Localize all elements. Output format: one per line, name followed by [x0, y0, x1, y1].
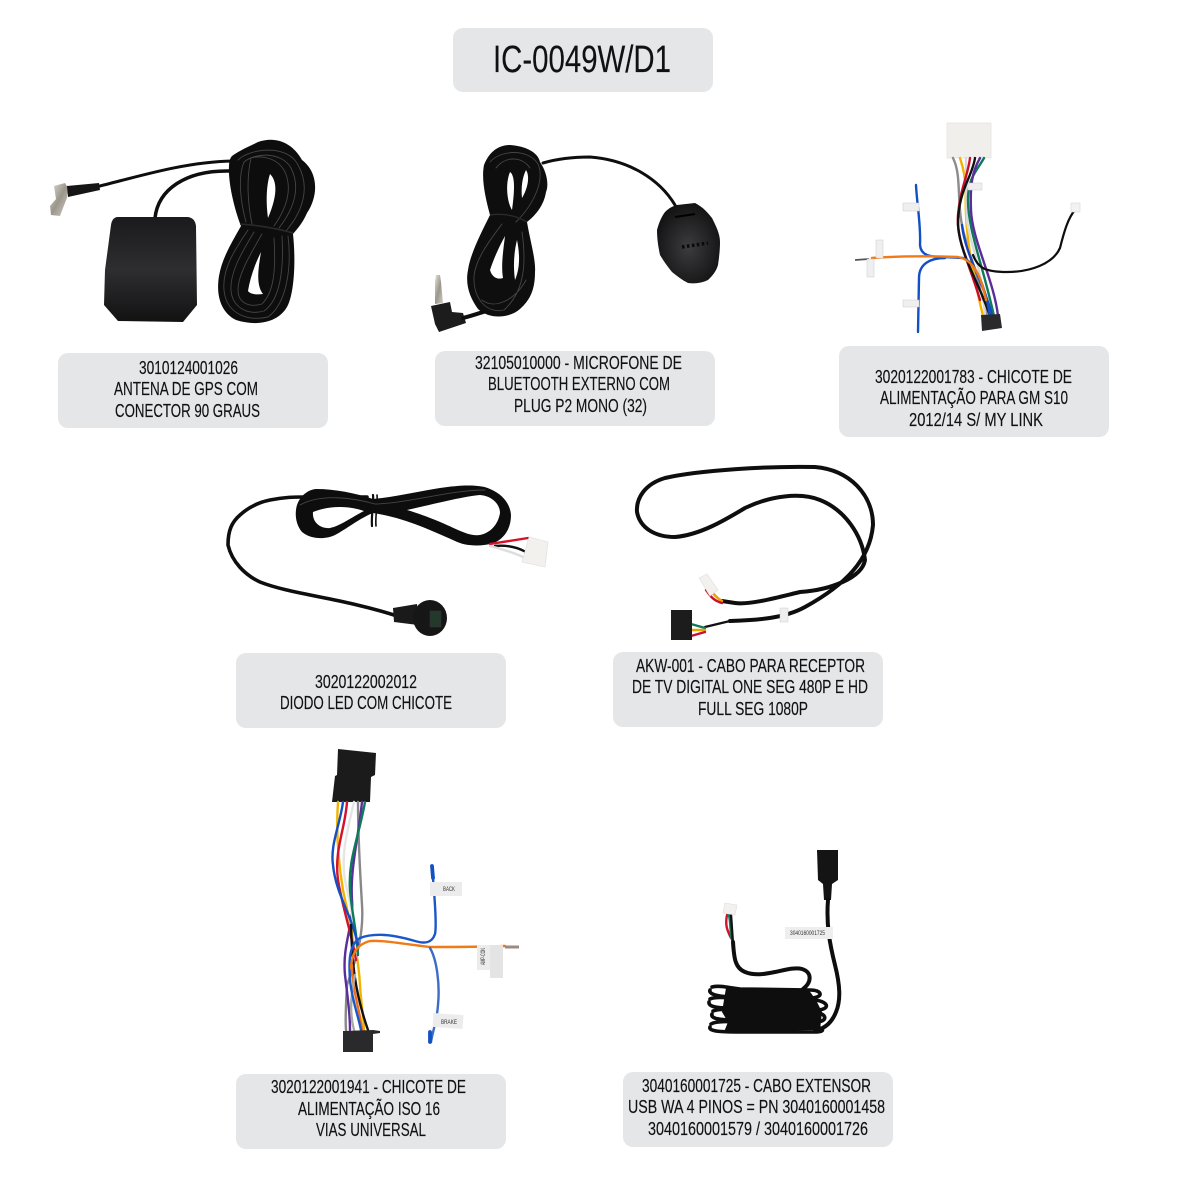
wire tags	[867, 183, 1080, 307]
caption: LED diode	[236, 653, 506, 728]
antenna cables	[100, 161, 232, 218]
wire tails	[691, 588, 730, 636]
black connector	[981, 314, 1002, 331]
caption: TV cable: FULL SEG 1080P	[698, 699, 808, 719]
white connector	[699, 574, 718, 596]
caption: microphone: PLUG P2 MONO (32)	[514, 396, 647, 416]
title	[453, 28, 713, 92]
caption: USB cable: 3040160001579 / 3040160001726	[648, 1119, 868, 1139]
LED wires	[490, 538, 528, 558]
icon: LED diode cable	[228, 486, 548, 636]
icon: USB extension cable	[709, 850, 839, 1032]
caption: TV cable: DE TV DIGITAL ONE SEG 480P E HD	[632, 677, 868, 697]
icon: ISO 16 harness	[332, 749, 519, 1052]
TV cable	[637, 467, 873, 621]
caption: microphone	[435, 351, 715, 426]
bundle wires	[332, 802, 368, 1030]
BACK label	[430, 882, 462, 896]
coiled cable	[218, 140, 315, 323]
caption: GM S10 harness: 2012/14 S/ MY LINK	[909, 410, 1043, 430]
blue wires	[916, 185, 990, 316]
P2 plug	[431, 275, 466, 332]
caption: ISO 16 harness: VIAS UNIVERSAL	[316, 1120, 426, 1140]
white connector	[947, 123, 991, 158]
small connector wires	[726, 915, 733, 944]
caption: LED diode: DIODO LED COM CHICOTE	[280, 693, 452, 713]
side cable	[973, 210, 1075, 272]
microphone cable coil	[463, 145, 675, 318]
USB plug	[817, 850, 838, 900]
caption: GM S10 harness	[839, 346, 1109, 437]
caption: ISO 16 harness: 3020122001941 - CHICOTE DE	[271, 1077, 466, 1097]
LED cable	[228, 497, 394, 615]
icon: GPS antenna	[50, 140, 315, 323]
antenna body	[104, 217, 197, 322]
caption: GM S10 harness: ALIMENTAÇÃO PARA GM S10	[880, 387, 1068, 408]
caption: USB cable	[623, 1072, 893, 1147]
caption: ISO 16 harness	[236, 1074, 506, 1149]
black connector	[671, 610, 692, 640]
orange wire	[872, 256, 986, 300]
branch wires	[349, 866, 519, 1042]
AMP-CON label	[477, 945, 503, 978]
cable tag	[780, 608, 788, 622]
harness wires	[855, 158, 1075, 332]
BRAKE label	[433, 1013, 463, 1029]
caption: ISO 16 harness: ALIMENTAÇÃO ISO 16	[298, 1098, 440, 1119]
caption: GPS antenna: 3010124001026	[139, 358, 238, 378]
icon: GM S10 power harness	[855, 123, 1080, 332]
icon: digital TV cable	[637, 467, 873, 640]
caption: TV cable	[613, 652, 883, 727]
SMA connector	[50, 183, 100, 216]
part number tag: 3040160001725	[790, 931, 826, 937]
USB cable and coil	[709, 900, 839, 1032]
caption: GM S10 harness: 3020122001783 - CHICOTE DE	[875, 367, 1072, 387]
part number tag	[785, 927, 833, 939]
caption: microphone: BLUETOOTH EXTERNO COM	[488, 374, 670, 394]
ISO connector	[332, 749, 376, 802]
title: IC-0049W/D1	[493, 39, 671, 81]
icon: bluetooth microphone	[431, 145, 720, 332]
bottom connector	[343, 1030, 380, 1052]
BACK label: BACK	[443, 887, 455, 893]
AMP-CON label: AMP-CON	[481, 948, 487, 965]
caption: GPS antenna: ANTENA DE GPS COM	[114, 379, 258, 399]
white plug	[522, 537, 548, 567]
caption: GPS antenna: CONECTOR 90 GRAUS	[115, 401, 260, 421]
caption: microphone: 32105010000 - MICROFONE DE	[475, 353, 682, 373]
small white connector	[723, 903, 737, 915]
microphone body	[657, 203, 720, 283]
caption: TV cable: AKW-001 - CABO PARA RECEPTOR	[636, 656, 865, 676]
caption: LED diode: 3020122002012	[315, 672, 417, 692]
caption: USB cable: USB WA 4 PINOS = PN 3040160001458	[628, 1097, 885, 1117]
caption: GPS antenna	[58, 353, 328, 428]
sensor head	[393, 600, 447, 636]
BRAKE label: BRAKE	[441, 1020, 457, 1026]
caption: USB cable: 3040160001725 - CABO EXTENSOR	[642, 1076, 871, 1096]
